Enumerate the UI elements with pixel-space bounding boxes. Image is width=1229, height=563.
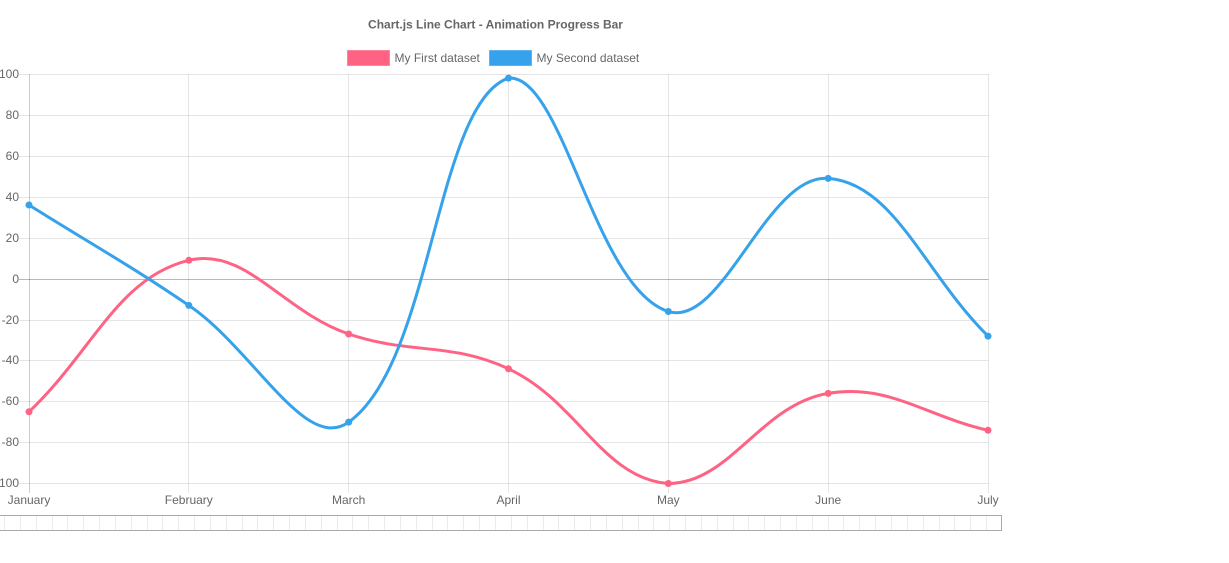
x axis labels [8, 493, 999, 507]
title: Chart.js Line Chart - Animation Progress Bar [368, 18, 623, 32]
legend item: My First dataset [348, 50, 481, 66]
y axis labels: 40 [6, 190, 19, 204]
y axis labels: -40 [2, 353, 19, 367]
y axis labels: -60 [2, 394, 19, 408]
y axis labels: 0 [12, 272, 19, 286]
y axis labels: -80 [2, 435, 19, 449]
x axis labels: February [165, 493, 213, 507]
x axis labels: April [496, 493, 521, 507]
x axis labels: March [332, 493, 365, 507]
legend item: My First dataset: My First dataset [394, 51, 481, 65]
legend [348, 50, 640, 66]
legend item: My Second dataset: My Second dataset [536, 51, 640, 65]
y axis labels: -20 [2, 313, 19, 327]
x axis labels: May [657, 493, 680, 507]
animation progress bar [0, 516, 1002, 530]
x axis labels: January [8, 493, 50, 507]
y axis labels: 60 [6, 149, 19, 163]
x axis labels: June [815, 493, 842, 507]
y axis labels [0, 67, 19, 490]
legend item: My Second dataset [490, 50, 640, 66]
dataset line: My First dataset [26, 257, 992, 487]
chart grid [19, 74, 988, 493]
y axis labels: 80 [6, 108, 19, 122]
y axis labels: 20 [6, 231, 19, 245]
x axis labels: July [977, 493, 999, 507]
dataset line: My Second dataset [26, 75, 992, 428]
